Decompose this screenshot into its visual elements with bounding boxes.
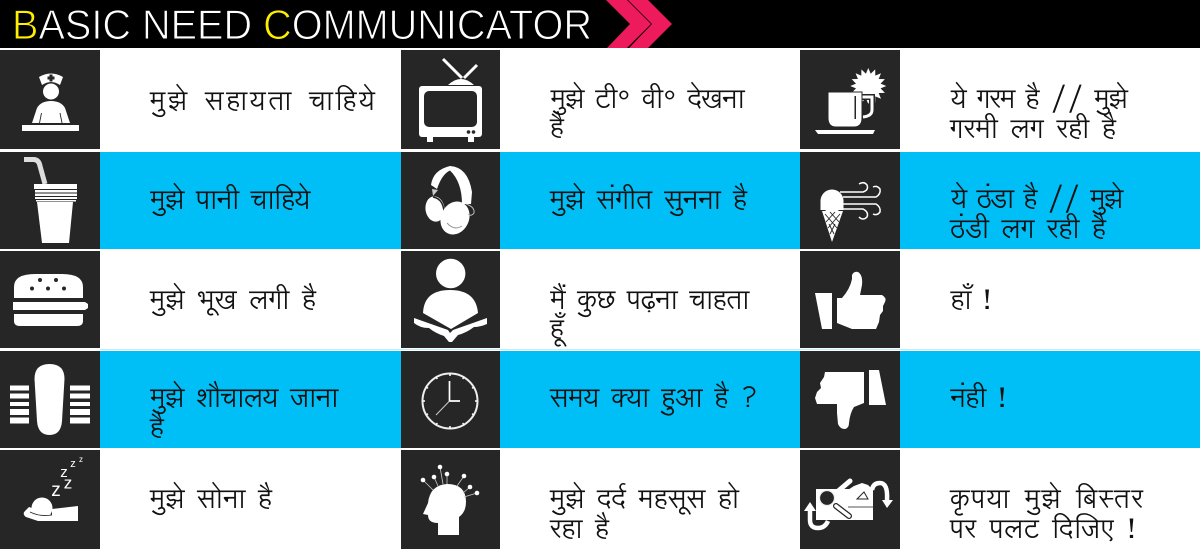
text: मुझे भूख लगी है [149, 279, 317, 323]
icon: nurse [0, 50, 100, 149]
text [549, 478, 740, 549]
icon: thumbs down [800, 351, 900, 448]
panel: pain [401, 450, 740, 549]
icon: headphones [401, 152, 500, 249]
panel: turn in bed [800, 450, 1144, 549]
icon: sleeping head on hand: z [70, 458, 76, 470]
icon: sleeping head on hand: z [64, 474, 72, 492]
panel: time [401, 351, 758, 448]
text: गरमी लग रही है [949, 108, 1117, 152]
text: मुझे संगीत सुनना है [549, 179, 748, 223]
text: मुझे पानी चाहिये [149, 179, 312, 223]
panel: yes [800, 251, 992, 348]
text [549, 78, 746, 151]
icon: thumbs up [800, 251, 900, 348]
text: है [149, 407, 165, 451]
text: ये ठंडा है // मुझे [950, 178, 1124, 222]
icon: sleeping head on hand [0, 450, 100, 549]
text [949, 178, 1124, 252]
icon: sleeping head on hand: z [60, 464, 68, 481]
text: ये गरम है // मुझे [950, 78, 1129, 122]
row bands [0, 150, 1200, 448]
text [149, 377, 339, 451]
title: BASIC NEED COMMUNICATOR [12, 1, 592, 48]
text [949, 78, 1129, 152]
text: है [549, 107, 565, 151]
text: नंही ! [950, 377, 1007, 421]
text: कृपया मुझे बिस्तर [949, 478, 1144, 522]
icon: drink cup with straw [0, 152, 100, 249]
text: ठंडी लग रही है [949, 208, 1107, 252]
panel: cold [800, 152, 1124, 252]
icon: double chevron arrow [606, 0, 672, 48]
icon: burger [0, 251, 100, 348]
icon: head with pins [401, 450, 500, 549]
text [949, 478, 1144, 549]
panel: reading [401, 251, 750, 352]
text: मुझे सहायता चाहिये [149, 80, 376, 124]
text: हाँ ! [950, 279, 992, 323]
panel: help [0, 50, 376, 149]
text: मैं कुछ पढ़ना चाहता [549, 279, 750, 323]
text: मुझे शौचालय जाना [149, 377, 339, 421]
icon: turn over in bed [800, 450, 900, 549]
text: मुझे टी॰ वी॰ देखना [550, 78, 746, 122]
icon: ice cream and wind [800, 152, 900, 249]
text: समय क्या हुआ है ? [549, 377, 758, 421]
panel: sleep [0, 450, 273, 549]
text: मुझे सोना है [149, 478, 273, 522]
panel: no [800, 351, 1007, 448]
panel: music [401, 152, 748, 249]
icon: clock [401, 351, 500, 448]
icon: squat toilet footprint [0, 351, 100, 448]
panel: water [0, 152, 312, 249]
icon: sleeping head on hand: z [51, 480, 61, 501]
panel: toilet [0, 351, 339, 451]
text: मुझे दर्द महसूस हो [549, 478, 740, 522]
panel: television [401, 50, 746, 151]
icon: person reading book [401, 251, 500, 348]
panel: hot [800, 50, 1129, 152]
text: हूँ [549, 308, 567, 352]
icon: sleeping head on hand: z [79, 455, 83, 464]
header bar [0, 0, 1200, 48]
text [549, 279, 750, 352]
panel: hunger [0, 251, 317, 348]
icon: hot cup with sun [800, 50, 900, 149]
icon: tv [401, 50, 500, 149]
